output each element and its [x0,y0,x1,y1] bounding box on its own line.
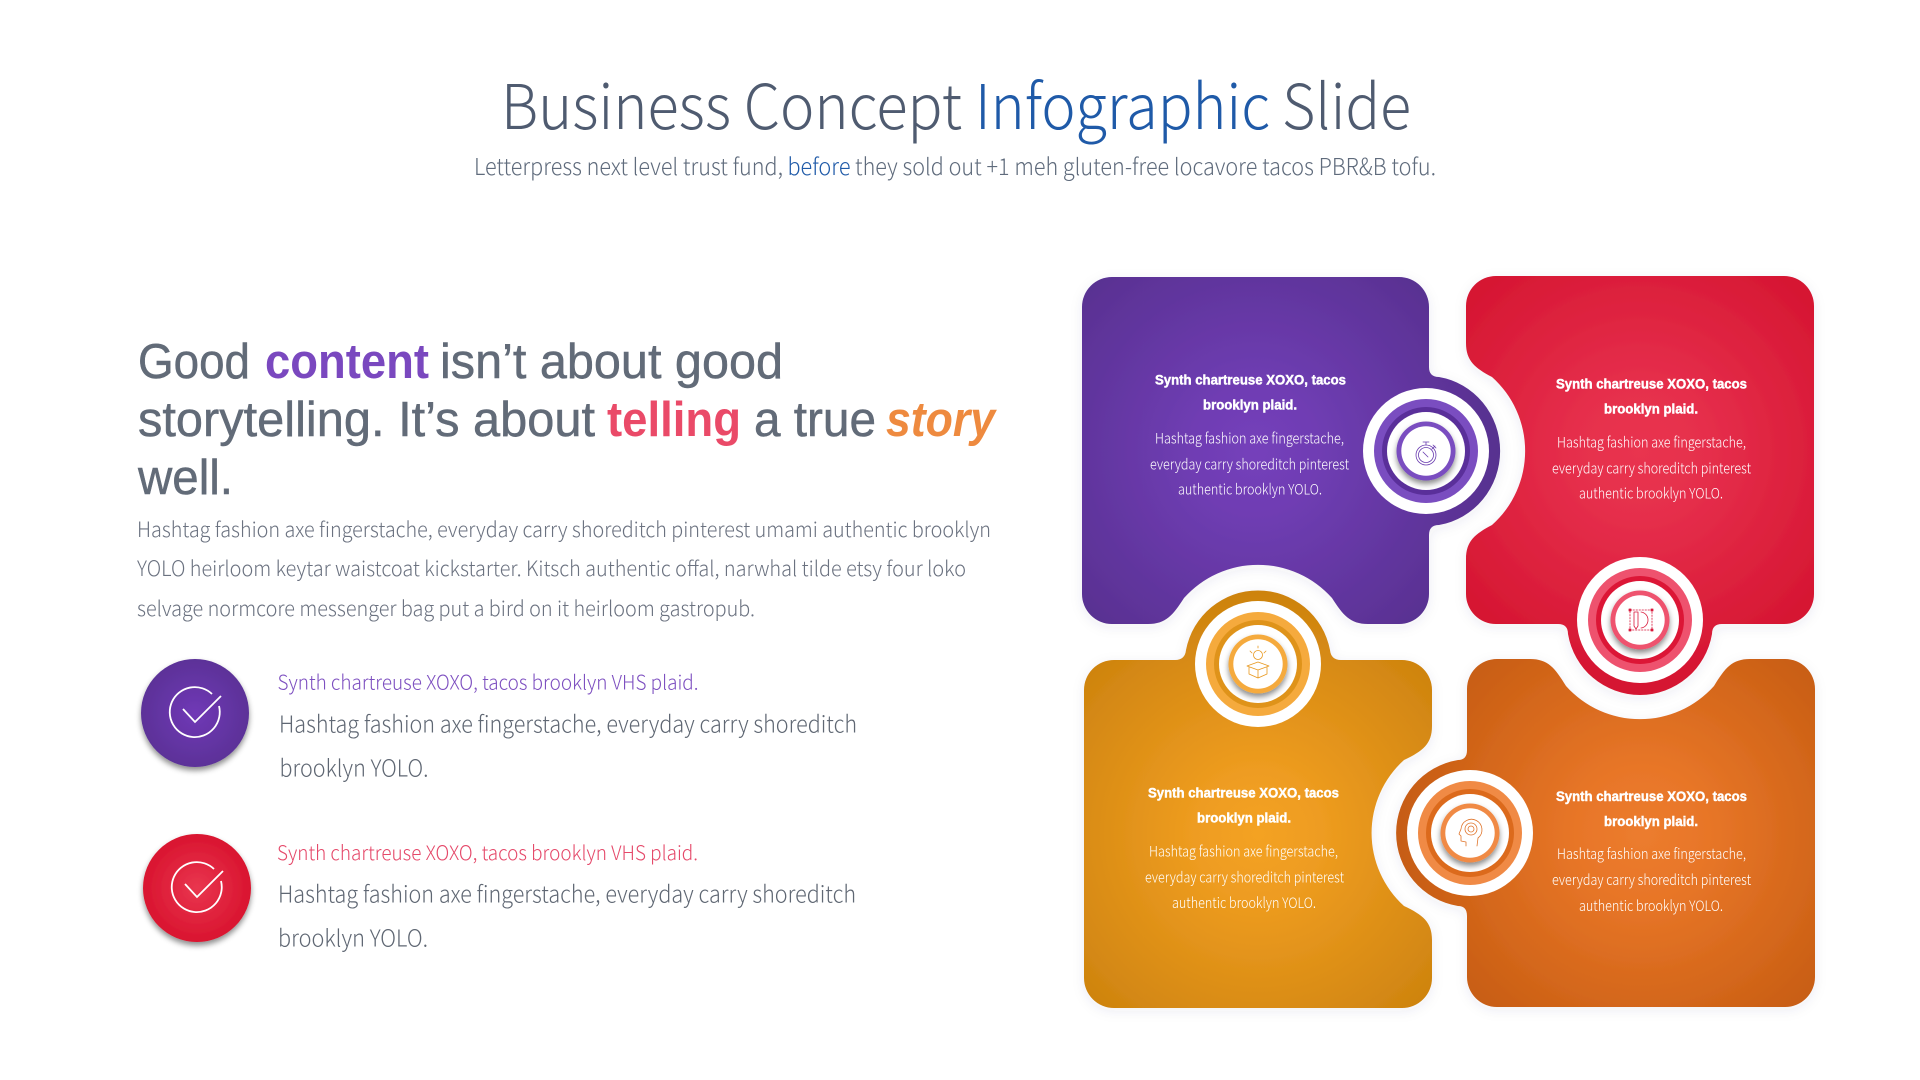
heading: isn’t about good [440,335,783,389]
subtitle [474,148,1436,182]
title [501,57,1411,147]
icon: design gear pencil [1629,609,1653,631]
panel: gold [1084,590,1432,1008]
list item: purple [141,659,857,784]
concentric rings: red [1577,557,1703,683]
gold panel text: everyday carry shoreditch pinterest [1145,866,1344,888]
gold panel text: brooklyn plaid. [1197,810,1291,826]
orange panel text: authentic brooklyn YOLO. [1579,895,1723,916]
purple panel text: Hashtag fashion axe fingerstache, [1155,428,1344,448]
purple panel text: authentic brooklyn YOLO. [1178,478,1322,500]
gold panel text: authentic brooklyn YOLO. [1172,892,1316,913]
orange panel text: everyday carry shoreditch pinterest [1552,869,1751,890]
item text: brooklyn YOLO. [280,750,428,784]
red panel text: Synth chartreuse XOXO, tacos [1556,376,1747,392]
icon: stopwatch [1416,442,1436,465]
body paragraph: selvage normcore messenger bag put a bird on it heirloom gastropub. [137,593,755,623]
purple panel text [1150,372,1349,500]
heading [137,335,997,505]
heading: storytelling. It’s about [138,393,595,447]
item text: Synth chartreuse XOXO, tacos brooklyn VHS plaid. [278,666,698,696]
title: Infographic [975,57,1270,147]
red panel text: authentic brooklyn YOLO. [1579,482,1723,504]
list item: red [143,834,856,954]
heading: content [265,335,429,389]
icon: idea box [1247,646,1269,678]
panel: purple [1082,277,1500,624]
item text: brooklyn YOLO. [278,920,428,954]
icon: head maze [1459,819,1482,846]
purple panel text: everyday carry shoreditch pinterest [1150,454,1349,474]
subtitle: they sold out +1 meh gluten-free locavore tacos PBR&B tofu. [855,148,1436,182]
orange panel text: Synth chartreuse XOXO, tacos [1556,788,1747,804]
item text: Synth chartreuse XOXO, tacos brooklyn VHS plaid. [277,837,698,866]
item text: Hashtag fashion axe fingerstache, everyday carry shoreditch [279,706,857,740]
body paragraph: Hashtag fashion axe fingerstache, everyday carry shoreditch pinterest umami authentic brooklyn [137,514,991,544]
icon: red check badge [143,834,251,942]
gold panel text: Synth chartreuse XOXO, tacos [1148,784,1339,800]
orange panel text: Hashtag fashion axe fingerstache, [1557,843,1746,864]
subtitle: Letterpress next level trust fund, [474,148,783,182]
concentric rings: orange [1407,770,1533,896]
heading: a true [754,393,876,447]
orange panel text [1552,788,1751,916]
subtitle: before [788,148,850,182]
heading: story [886,393,997,447]
body paragraph [137,514,991,623]
title: Slide [1282,57,1411,147]
heading: telling [607,393,741,447]
heading: well. [137,451,233,505]
item text [278,666,857,784]
red panel text: everyday carry shoreditch pinterest [1552,458,1751,478]
heading: Good [138,335,250,389]
item text [277,837,856,954]
panel: orange [1396,659,1815,1007]
icon: purple check badge [141,659,249,767]
body paragraph: YOLO heirloom keytar waistcoat kickstarter. Kitsch authentic offal, narwhal tilde etsy four loko [137,553,966,583]
concentric rings: purple [1363,388,1489,514]
item text: Hashtag fashion axe fingerstache, everyday carry shoreditch [278,876,856,910]
concentric rings: gold [1195,601,1321,727]
red panel text: Hashtag fashion axe fingerstache, [1557,432,1746,452]
red panel text [1552,376,1751,504]
purple panel text: brooklyn plaid. [1203,396,1297,412]
red panel text: brooklyn plaid. [1604,400,1698,416]
panel: red [1466,276,1814,695]
title: Business Concept [501,57,962,147]
orange panel text: brooklyn plaid. [1604,813,1698,829]
gold panel text: Hashtag fashion axe fingerstache, [1149,840,1338,862]
purple panel text: Synth chartreuse XOXO, tacos [1155,372,1346,388]
gold panel text [1145,784,1344,913]
